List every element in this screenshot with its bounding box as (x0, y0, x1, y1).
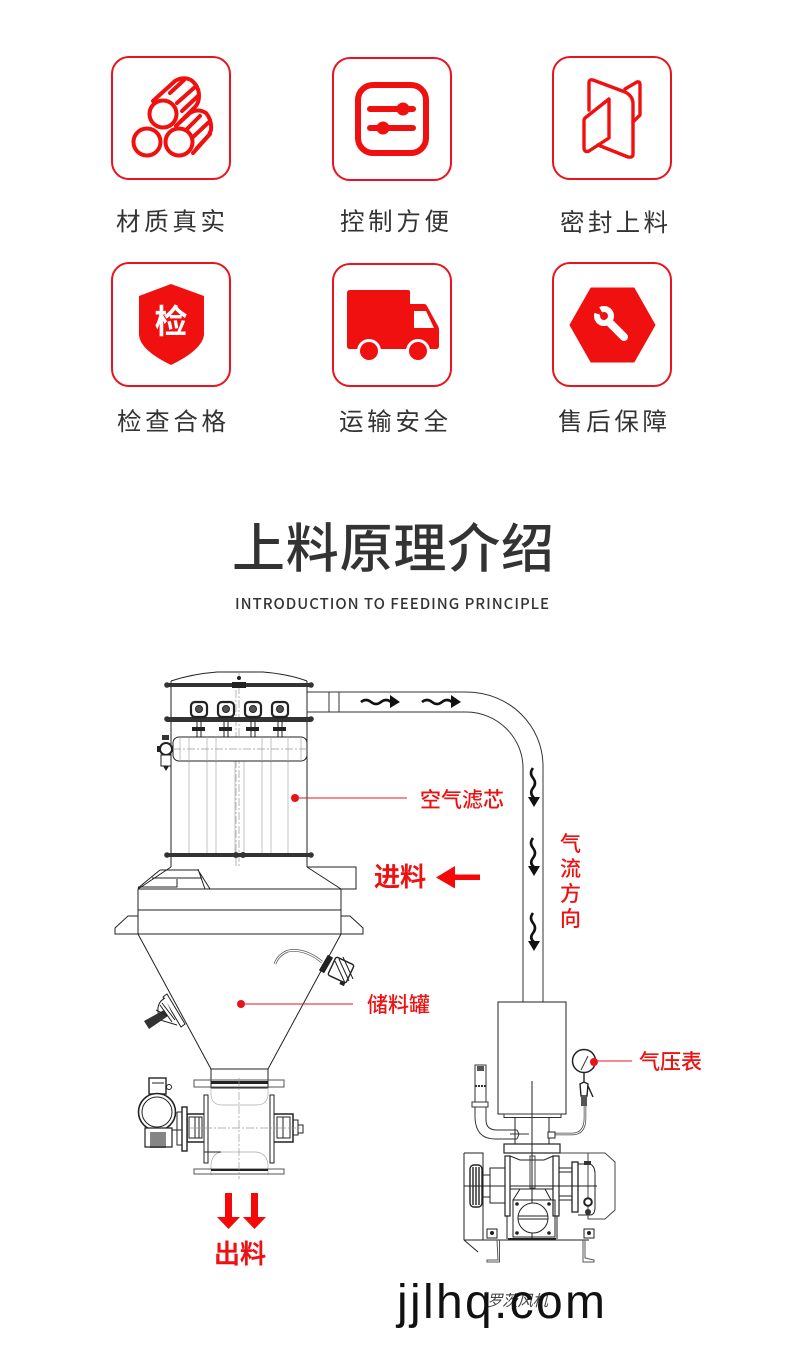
icon: shield (112, 263, 230, 386)
hopper cone (138, 934, 341, 1069)
icon: wrench (553, 263, 671, 386)
feature: inspection (112, 263, 230, 436)
callout: 储料罐: 储料罐 (367, 994, 430, 1017)
airflow arrow 5 (528, 913, 540, 951)
feature: after-sales (553, 263, 671, 436)
label: 售后保障: 售后保障 (558, 408, 667, 436)
callout: 进料 (374, 862, 480, 892)
air regulator (157, 735, 172, 771)
callout: 出料: 出料 (214, 1239, 266, 1269)
callout: 气流方向: 向 (560, 908, 581, 931)
callout: 气压表 (590, 1051, 702, 1074)
label: 控制方便: 控制方便 (340, 208, 449, 236)
pressure gauge (548, 1050, 596, 1138)
icon: truck (333, 264, 451, 386)
icon: shield: 检 (154, 303, 188, 340)
diagram: dust collector and hopper (115, 672, 363, 1179)
callout: 气压表: 气压表 (639, 1051, 702, 1074)
airflow arrow 4 (528, 838, 540, 876)
pulley and guard (464, 1153, 505, 1252)
diagram: conveying pipe (307, 692, 543, 1002)
label: 检查合格: 检查合格 (117, 408, 226, 436)
callout: 储料罐 (237, 994, 430, 1017)
callout: 气流方向: 方 (560, 883, 581, 906)
blower body (464, 1156, 589, 1240)
feature: transport (333, 264, 451, 436)
feature: sealing (553, 57, 671, 237)
label: 材质真实: 材质真实 (116, 208, 225, 236)
safety valve (472, 1065, 529, 1139)
icon: sliders (333, 58, 451, 180)
valve motor (138, 1078, 187, 1151)
subtitle: INTRODUCTION TO FEEDING PRINCIPLE (235, 593, 549, 614)
pulse valves (191, 702, 288, 737)
drive end (510, 1153, 615, 1219)
diagram: roots blower (464, 1002, 615, 1310)
callout: 气流方向 (560, 833, 581, 931)
feature: material (112, 57, 230, 236)
label: 运输安全: 运输安全 (339, 408, 448, 436)
icon: pipes (112, 57, 230, 179)
callout: 进料: 进料 (374, 862, 426, 892)
watermark: jjlhq.com (395, 1276, 605, 1329)
level sensor (275, 950, 354, 986)
dome lid (171, 672, 307, 681)
hopper shoulder (115, 867, 363, 934)
label: 密封上料: 密封上料 (560, 209, 668, 237)
air tank (173, 737, 307, 761)
callout: 气流方向: 气 (560, 833, 581, 856)
callout: 空气滤芯 (291, 789, 504, 812)
feature: control (333, 58, 451, 236)
airflow arrow 3 (528, 768, 540, 807)
callout: 出料 (214, 1193, 266, 1269)
pipe (307, 692, 543, 1002)
callout: 气流方向: 流 (560, 858, 581, 881)
filter housing (164, 672, 314, 867)
mounting feet (487, 1229, 594, 1262)
vibrator (144, 994, 185, 1029)
silencer (498, 1002, 566, 1240)
blower caption: 罗茨风机 (487, 1292, 548, 1310)
icon: sealed panels (553, 57, 671, 179)
callout: 空气滤芯: 空气滤芯 (420, 789, 504, 812)
title: 上料原理介绍 (232, 507, 554, 583)
rotary valve (187, 1078, 303, 1179)
airflow arrow 1 (361, 695, 400, 708)
outlet flange (194, 1069, 284, 1088)
airflow arrow 2 (422, 695, 461, 708)
